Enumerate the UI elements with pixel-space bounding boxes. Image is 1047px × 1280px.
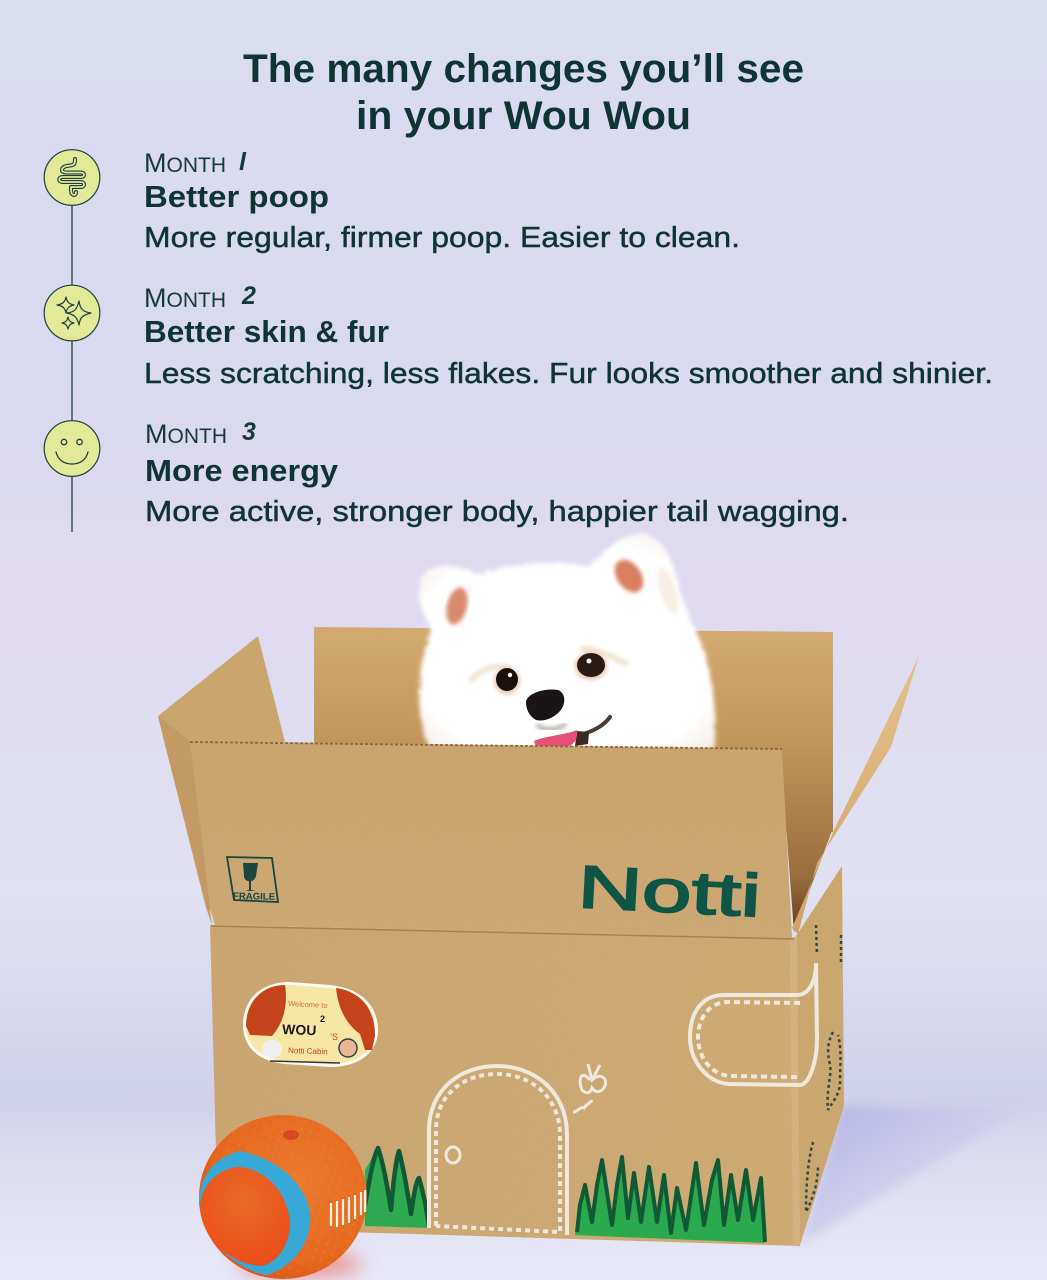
title: in your Wou Wou <box>356 94 691 138</box>
month 3 block <box>145 418 849 528</box>
cardboard grain <box>190 741 800 1246</box>
title: The many changes you’ll see <box>243 47 804 91</box>
flap fold shadow <box>212 926 794 939</box>
month 2 block <box>144 282 993 390</box>
glass icon <box>243 863 258 891</box>
curtain right <box>336 988 375 1050</box>
muzzle shade <box>537 724 566 729</box>
brow tint <box>470 648 628 682</box>
timeline line <box>71 200 73 532</box>
ball dimples <box>199 1115 367 1279</box>
month 2 number: 2 <box>241 282 256 310</box>
box corner edge <box>790 936 800 1245</box>
sticker panel <box>246 985 375 1064</box>
icon: intestine <box>44 150 100 205</box>
blue band <box>199 1151 310 1275</box>
month 1 label: MONTH <box>144 148 226 178</box>
month 3 label: MONTH <box>145 419 227 449</box>
sticker bottom bar <box>270 1061 340 1063</box>
sticker name text: WOU <box>282 1021 317 1038</box>
ball <box>199 1115 367 1279</box>
front folded flap <box>190 741 792 938</box>
fragile label: FRAGILE <box>233 891 275 903</box>
nose <box>526 690 564 721</box>
ball stripes <box>331 1190 365 1227</box>
door drawing <box>429 1066 567 1235</box>
sticker possessive: ’S <box>330 1032 338 1042</box>
sticker welcome text: Welcome to <box>288 999 328 1010</box>
month 2 heading: Better skin & fur <box>144 314 389 349</box>
right eye <box>575 652 607 680</box>
left flap edge <box>158 716 212 912</box>
ear inner right <box>609 554 649 598</box>
puppy <box>419 533 715 750</box>
month 1 description: More regular, firmer poop. Easier to clean. <box>144 222 740 254</box>
sticker superscript: 2 <box>320 1014 325 1024</box>
icon: smiley <box>44 421 100 476</box>
sticker cat <box>262 1040 282 1058</box>
box front <box>210 925 800 1246</box>
puppy fur <box>419 533 715 750</box>
cardboard corrugated edge <box>190 742 782 749</box>
month 3 number: 3 <box>242 418 256 446</box>
red reflection <box>238 1250 362 1278</box>
floor shadow of box <box>800 1106 1020 1245</box>
sticker base <box>243 982 378 1067</box>
fragile mark <box>227 857 278 903</box>
butterfly drawing <box>573 1064 606 1112</box>
left eye <box>494 668 520 694</box>
ear shading right <box>653 565 683 615</box>
box right side <box>796 866 844 1245</box>
sticker <box>243 982 378 1067</box>
title <box>243 47 804 138</box>
left flap <box>158 636 285 925</box>
inside shadow of box <box>780 745 833 932</box>
month 2 description: Less scratching, less flakes. Fur looks smoother and shinier. <box>144 358 993 390</box>
sticker character <box>339 1039 357 1057</box>
grass left <box>365 1147 429 1228</box>
grass right <box>575 1157 765 1243</box>
month 1 heading: Better poop <box>144 179 329 214</box>
timeline <box>44 150 100 532</box>
month 3 heading: More energy <box>145 453 339 488</box>
back flap of box <box>314 627 833 832</box>
right flap <box>792 656 919 934</box>
logo: Notti: Notti <box>576 853 763 930</box>
curtain left <box>246 985 286 1036</box>
ball center <box>200 1167 290 1266</box>
ball body <box>199 1115 367 1279</box>
icon: sparkles <box>44 285 100 341</box>
month 1 block <box>144 148 740 254</box>
ear inner left <box>443 585 471 627</box>
tongue <box>534 730 577 747</box>
ball stem <box>283 1130 299 1140</box>
sticker cabin text: Notti Cabin <box>288 1046 328 1056</box>
mouth <box>586 717 610 733</box>
month 3 description: More active, stronger body, happier tail wagging. <box>145 496 849 528</box>
path drawing <box>690 963 817 1085</box>
month 2 label: MONTH <box>144 283 226 313</box>
side box doodles <box>806 925 841 1212</box>
month 1 number: l <box>239 148 247 176</box>
